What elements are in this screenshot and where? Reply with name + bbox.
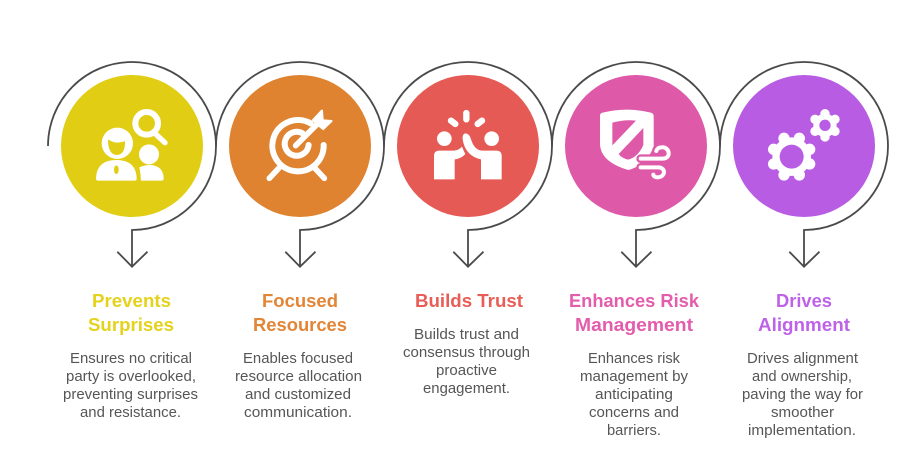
description 1 bbox=[63, 351, 198, 421]
description 2: resource allocation bbox=[235, 369, 362, 385]
description 4: barriers. bbox=[607, 423, 661, 439]
heading 4: Management bbox=[575, 314, 693, 335]
icon: shield with wind bbox=[600, 110, 669, 177]
circle 2 bbox=[229, 75, 371, 217]
description 3: Builds trust and bbox=[414, 327, 519, 343]
heading 1: Surprises bbox=[88, 314, 174, 335]
ring arrow 1 bbox=[48, 62, 216, 267]
heading 2: Resources bbox=[253, 314, 347, 335]
description 3 bbox=[403, 327, 530, 397]
ring arrow 3 bbox=[384, 62, 552, 267]
description 3: engagement. bbox=[423, 381, 510, 397]
description 1: preventing surprises bbox=[63, 387, 198, 403]
description 5: Drives alignment bbox=[747, 351, 858, 367]
description 5: smoother bbox=[771, 405, 834, 421]
description 2: and customized bbox=[245, 387, 351, 403]
description 1: party is overlooked, bbox=[66, 369, 196, 385]
heading 1 bbox=[88, 290, 174, 335]
panel: prevents surprises bbox=[48, 62, 216, 421]
description 2: Enables focused bbox=[243, 351, 353, 367]
heading 2: Focused bbox=[262, 290, 338, 311]
description 4: anticipating bbox=[595, 387, 673, 403]
description 5 bbox=[742, 351, 863, 439]
heading 5: Alignment bbox=[758, 314, 850, 335]
description 5: and ownership, bbox=[752, 369, 852, 385]
circle 5 bbox=[733, 75, 875, 217]
panel: drives alignment bbox=[720, 62, 888, 439]
description 2 bbox=[235, 351, 362, 421]
description 5: implementation. bbox=[748, 423, 856, 439]
description 5: paving the way for bbox=[742, 387, 863, 403]
description 1: and resistance. bbox=[80, 405, 181, 421]
description 1: Ensures no critical bbox=[70, 351, 192, 367]
heading 5 bbox=[758, 290, 850, 335]
description 4 bbox=[580, 351, 689, 439]
circle 3 bbox=[397, 75, 539, 217]
panel: focused resources bbox=[216, 62, 384, 421]
icon: target and dart bbox=[269, 109, 333, 178]
icon: gears bbox=[768, 109, 840, 181]
ring arrow 4 bbox=[552, 62, 720, 267]
heading 4 bbox=[569, 290, 700, 335]
heading 3: Builds Trust bbox=[415, 290, 523, 311]
circle 1 bbox=[61, 75, 203, 217]
ring arrow 5 bbox=[720, 62, 888, 267]
description 2: communication. bbox=[244, 405, 352, 421]
icon: high five bbox=[434, 113, 502, 179]
description 3: consensus through bbox=[403, 345, 530, 361]
description 4: management by bbox=[580, 369, 689, 385]
description 4: concerns and bbox=[589, 405, 679, 421]
heading 4: Enhances Risk bbox=[569, 290, 700, 311]
heading 5: Drives bbox=[776, 290, 832, 311]
circle 4 bbox=[565, 75, 707, 217]
panel: builds trust bbox=[384, 62, 552, 397]
description 3: proactive bbox=[436, 363, 497, 379]
ring arrow 2 bbox=[216, 62, 384, 267]
panel: enhances risk management bbox=[552, 62, 720, 439]
heading 1: Prevents bbox=[92, 290, 171, 311]
description 4: Enhances risk bbox=[588, 351, 681, 367]
heading 2 bbox=[253, 290, 347, 335]
icon: people and magnifier bbox=[96, 112, 165, 181]
